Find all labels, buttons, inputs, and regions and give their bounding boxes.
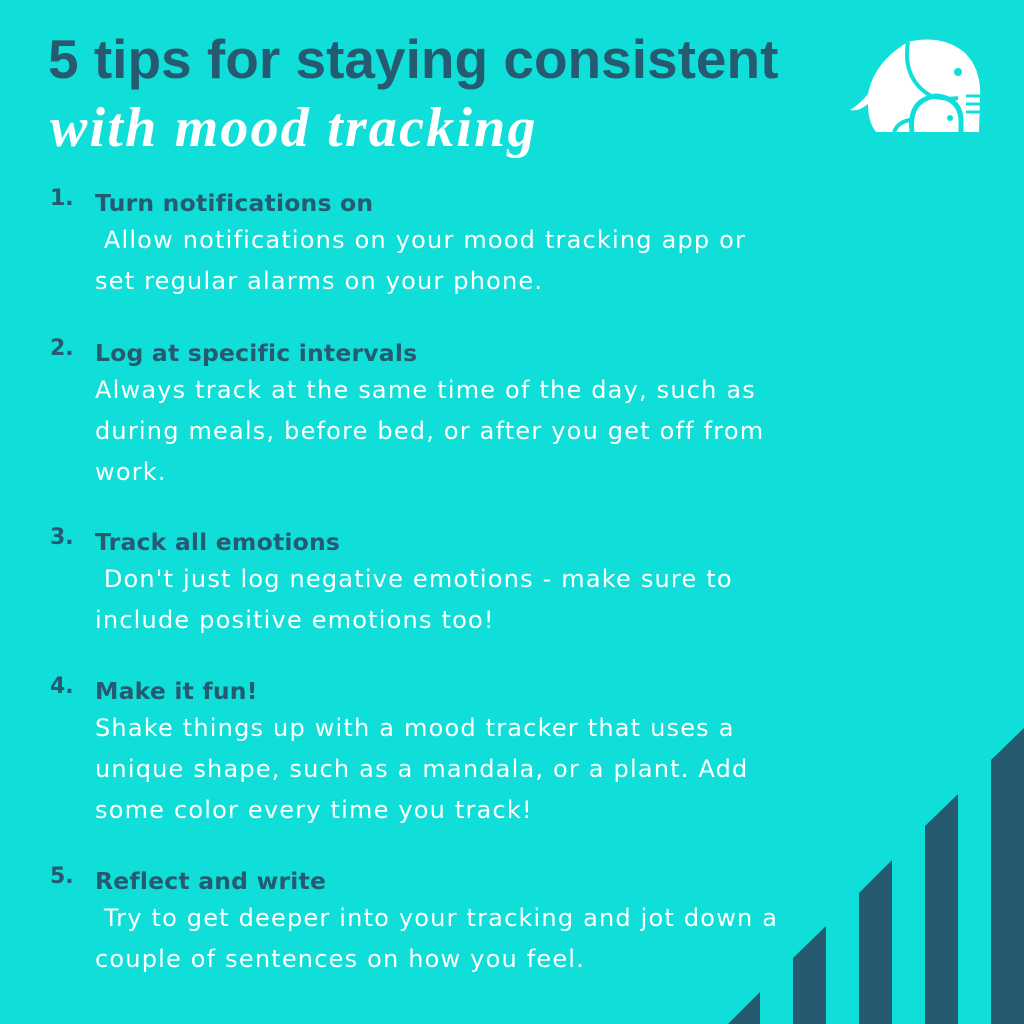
tip 5: Reflect and write [95,867,326,895]
tip 2: work. [95,458,167,486]
tip 2: during meals, before bed, or after you get off from [95,417,764,445]
tip 5: couple of sentences on how you feel. [95,945,585,973]
tip 1: Allow notifications on your mood tracking app or [104,226,746,254]
tip 3: Don't just log negative emotions - make sure to [104,565,733,593]
tip 4: 4. [50,674,74,699]
tip 3: include positive emotions too! [95,606,495,634]
tip 1 [50,186,746,295]
title: 5 tips for staying consistent [48,28,778,90]
tip 2: Log at specific intervals [95,339,417,367]
tip 2 [50,336,764,486]
tip 2: Always track at the same time of the day, such as [95,376,756,404]
tip 3: 3. [50,525,74,550]
tip 4 [50,674,748,824]
tip 5 [50,864,778,973]
tip 1: Turn notifications on [95,189,373,217]
tip 4: some color every time you track! [95,796,533,824]
icon: elephant logo [850,40,980,132]
tip 3 [50,525,733,634]
tip 4: Make it fun! [95,677,258,705]
tip 4: unique shape, such as a mandala, or a plant. Add [95,755,748,783]
tip 1: set regular alarms on your phone. [95,267,543,295]
tip 2: 2. [50,336,74,361]
tip 5: Try to get deeper into your tracking and jot down a [104,904,778,932]
tip 3: Track all emotions [95,528,340,556]
subtitle: with mood tracking [50,97,538,159]
tip 1: 1. [50,186,74,211]
tip 4: Shake things up with a mood tracker that uses a [95,714,735,742]
tip 5: 5. [50,864,74,889]
